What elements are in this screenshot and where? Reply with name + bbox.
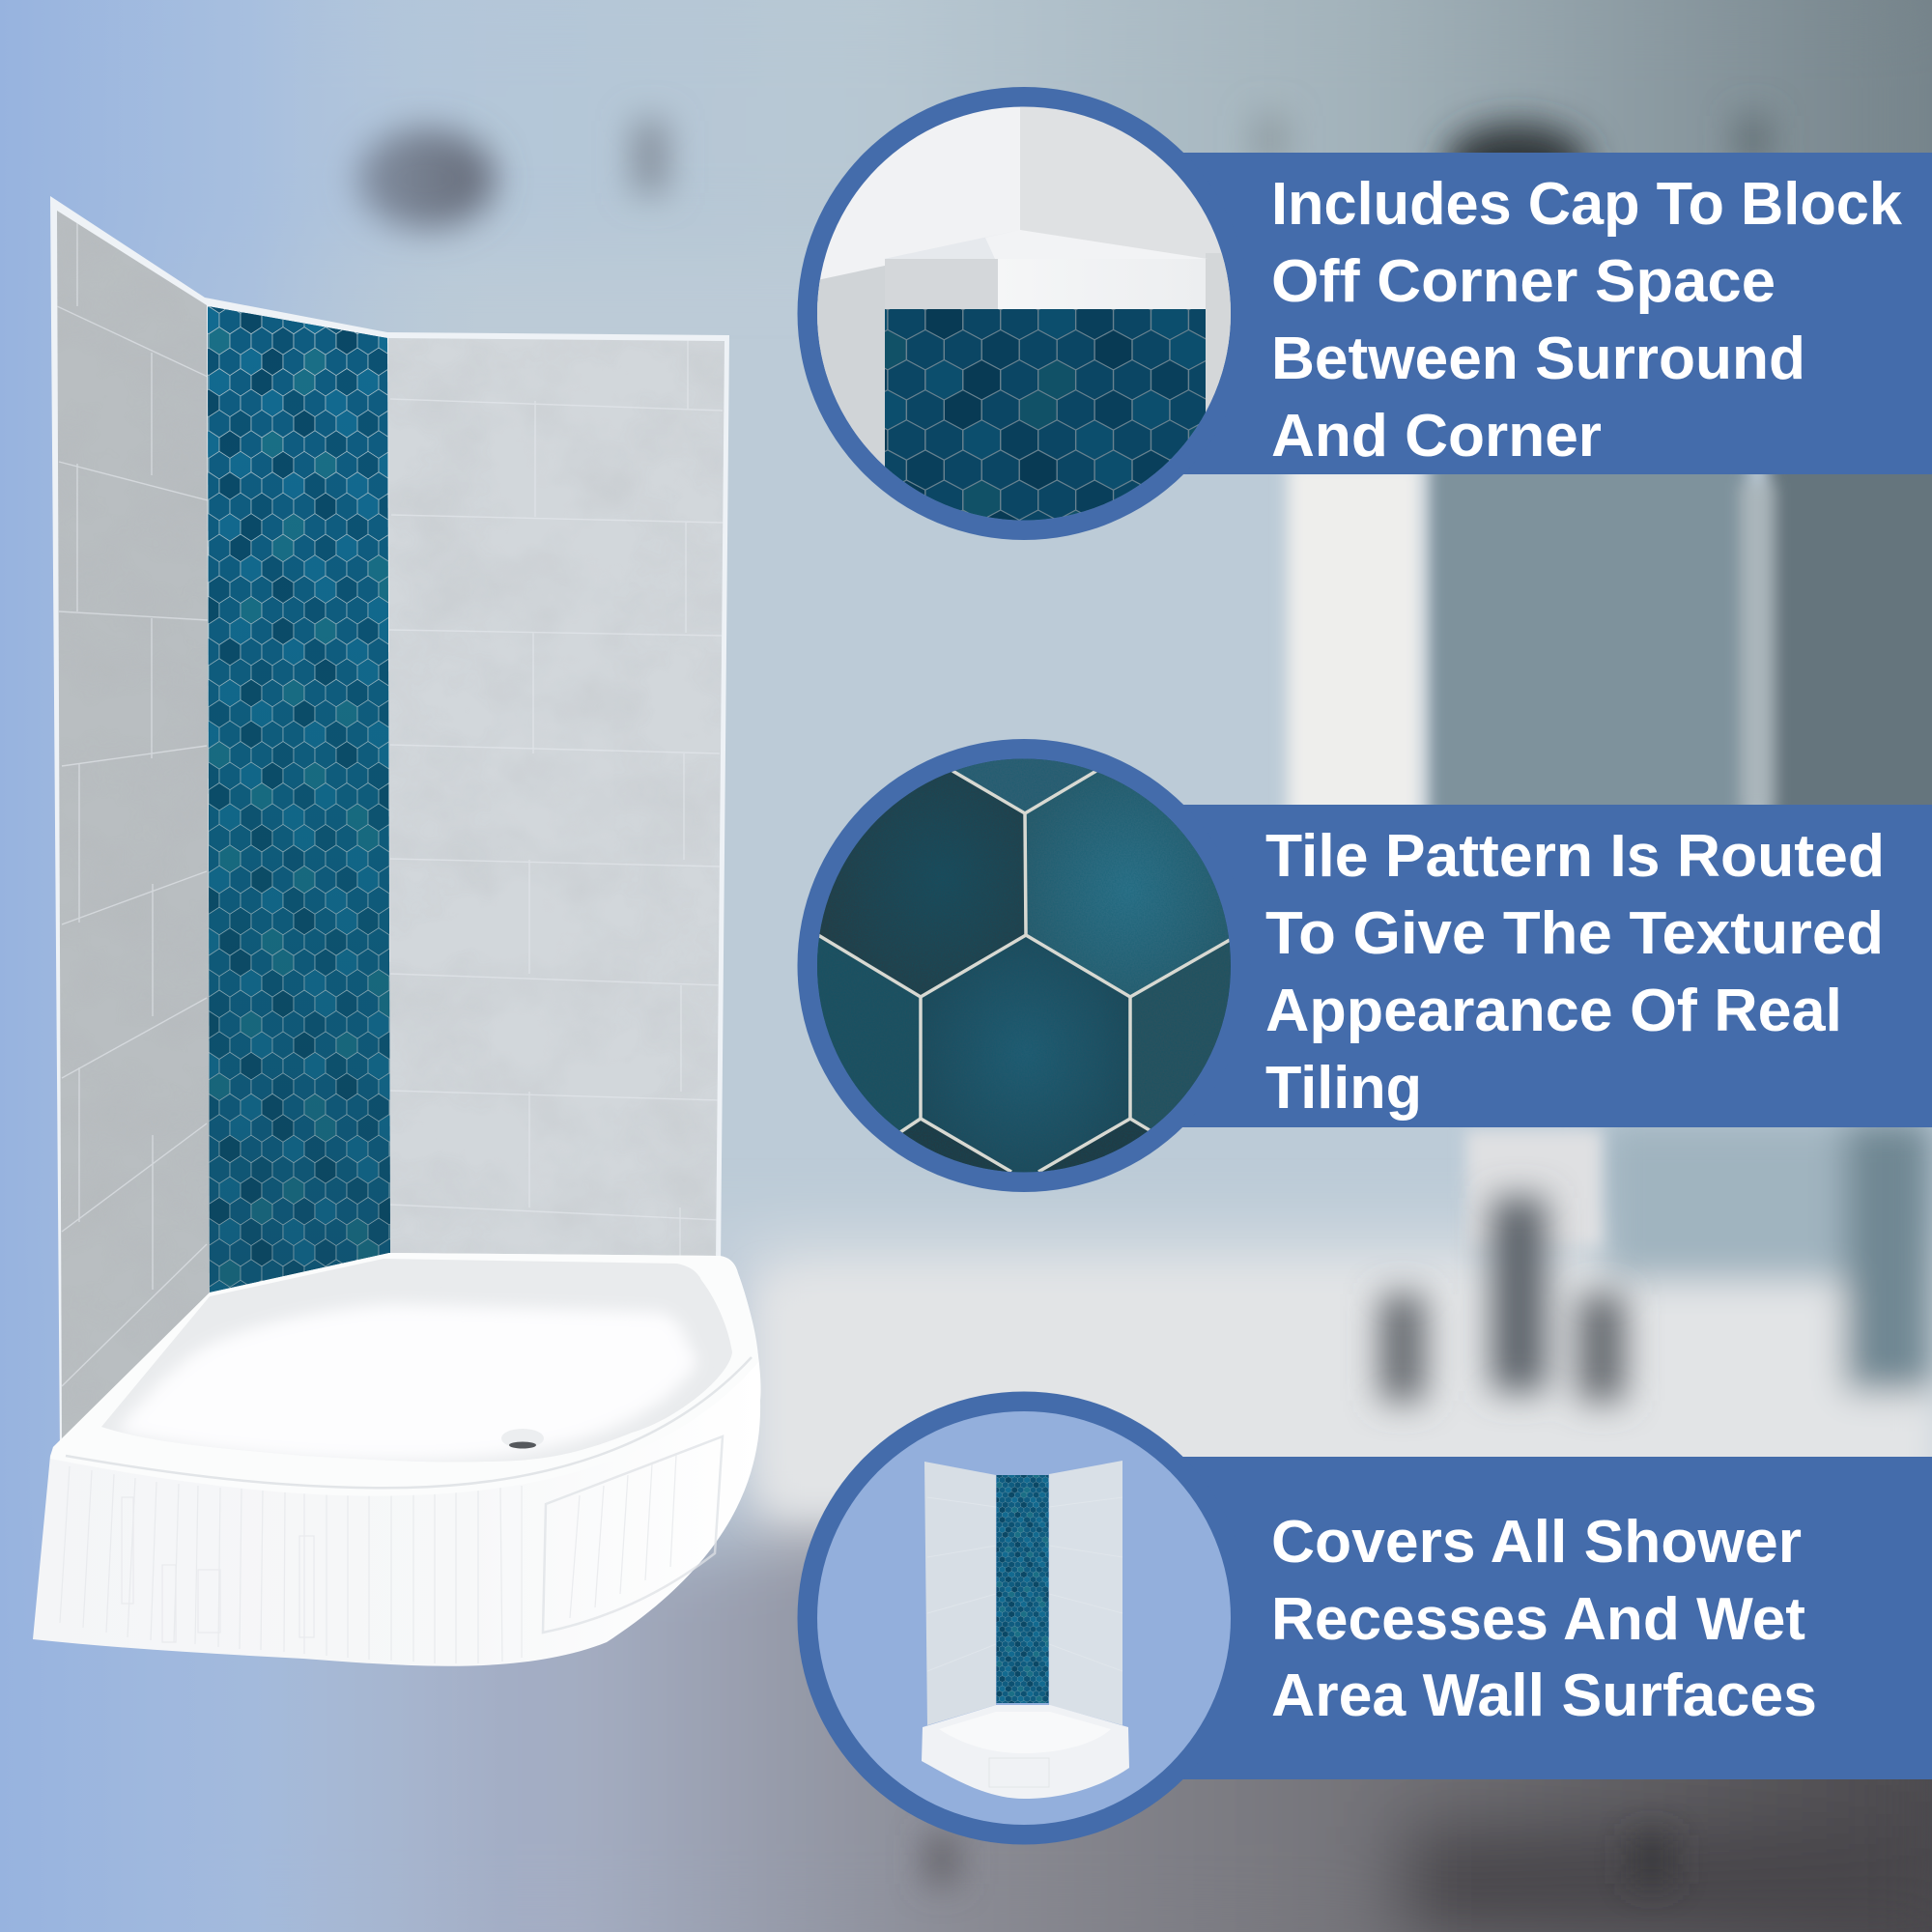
tray basin: [97, 1256, 744, 1468]
panel: right concrete wall: [386, 333, 729, 1265]
callout 3: full coverage: Recesses And Wet: [1271, 1586, 1805, 1653]
drain: [501, 1429, 544, 1449]
banner: [1159, 153, 1932, 474]
shower tray: [33, 1253, 761, 1666]
white wall trim: [50, 196, 729, 1454]
callout 2: tile pattern: Appearance Of Real: [1265, 978, 1842, 1044]
callout 2: tile pattern: [798, 739, 1932, 1192]
circle image: miniature shower: [817, 1411, 1231, 1825]
callout 1: cap: [798, 87, 1932, 540]
banner text: Tile Pattern Is Routed: [1265, 823, 1885, 890]
tray front brick relief: [60, 1436, 723, 1663]
callout 1: cap: Off Corner Space: [1271, 248, 1776, 315]
callout 1: cap: And Corner: [1271, 403, 1602, 469]
callout 3: full coverage: Area Wall Surfaces: [1271, 1662, 1817, 1729]
circle ring: [798, 739, 1250, 1192]
circle image: corner cap closeup: [817, 106, 1231, 520]
panel: left concrete wall: [57, 211, 210, 1438]
callout 1: cap: Between Surround: [1271, 326, 1805, 392]
callout 3: full coverage: [798, 1391, 1932, 1845]
callout 2: tile pattern: To Give The Textured: [1265, 900, 1884, 967]
banner text: Includes Cap To Block: [1271, 171, 1903, 238]
tray body: [33, 1253, 761, 1666]
callout 2: tile pattern: Tiling: [1265, 1055, 1422, 1122]
tray rim: [50, 1253, 758, 1496]
banner text: Covers All Shower: [1271, 1509, 1802, 1576]
circle image: hexagon tile closeup: [817, 758, 1231, 1173]
panel: blue hexagon tile strip: [208, 306, 390, 1293]
banner: [1159, 805, 1932, 1127]
banner: [1159, 1457, 1932, 1779]
circle ring: [798, 1391, 1250, 1845]
circle ring: [798, 87, 1250, 540]
shower surround walls: [48, 193, 729, 1459]
